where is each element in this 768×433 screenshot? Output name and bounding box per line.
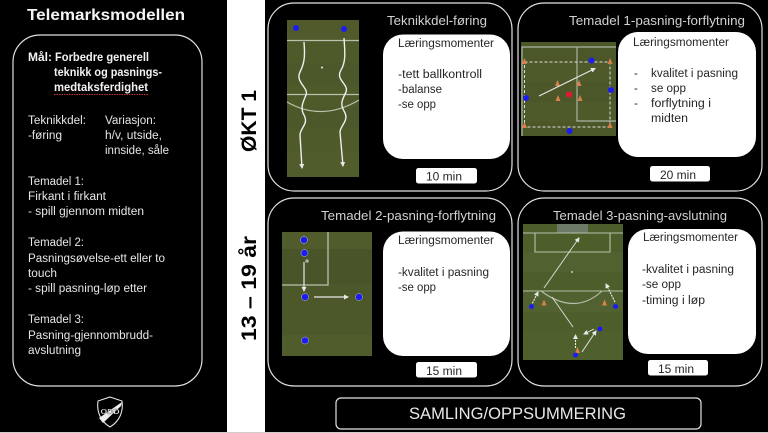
pitch diagram: passing drill (282, 232, 372, 356)
variation block: h/v, utside, (105, 130, 162, 142)
learning points card (383, 232, 510, 356)
duration badge (648, 360, 708, 376)
theme part 3 block: Pasning-gjennombrudd- (28, 330, 153, 342)
learning points card: forflytning i (651, 98, 711, 110)
summary bar (336, 398, 701, 429)
duration badge: 20 min (660, 170, 696, 182)
theme part 3 block: Temadel 3: (28, 314, 84, 326)
rotated label: session: ØKT 1 (238, 90, 261, 152)
panel title: Temadel 2-pasning-forflytning (321, 208, 496, 223)
goal text block: medtaksferdighet (54, 82, 148, 94)
duration badge (650, 166, 710, 182)
theme part 3 block (28, 314, 153, 357)
learning points card: Læringsmomenter (398, 235, 494, 247)
variation block: innside, såle (105, 145, 169, 157)
learning points card: -balanse (398, 84, 442, 96)
left sidebar (13, 7, 202, 427)
technique block: Teknikkdel: (28, 115, 86, 127)
theme part 2 block (28, 237, 165, 295)
learning points card (628, 229, 756, 354)
theme part 2 block: Pasningsøvelse-ett eller to (28, 253, 165, 265)
sidebar frame (13, 35, 202, 386)
learning points card: -tett ballkontroll (398, 69, 482, 81)
technique block: -føring (28, 130, 62, 142)
icon: club shield logo: ODD (100, 409, 120, 416)
panel title: Temadel 1-pasning-forflytning (569, 13, 745, 28)
panel: theme part 1 (518, 3, 762, 191)
theme part 2 block: Temadel 2: (28, 237, 84, 249)
duration badge: 15 min (658, 364, 694, 376)
learning points card: -kvalitet i pasning (398, 267, 489, 279)
theme part 3 block: avslutning (28, 345, 81, 357)
learning points card: se opp (651, 83, 686, 95)
icon: club shield logo (98, 397, 122, 427)
pitch diagram: square in square (521, 42, 616, 136)
goal text block: Mål: (28, 52, 52, 64)
panel title: Teknikkdel-føring (387, 13, 487, 28)
goal text block (28, 52, 162, 94)
summary bar: SAMLING/OPPSUMMERING (409, 405, 626, 423)
sidebar title: Telemarksmodellen (27, 7, 185, 24)
learning points card: -se opp (398, 282, 436, 294)
theme part 1 block: - spill gjennom midten (28, 206, 144, 218)
learning points card: -se opp (642, 279, 681, 291)
duration badge (416, 362, 477, 378)
variation block (105, 115, 169, 157)
goal text block: Forbedre generell (55, 52, 149, 64)
pitch diagram: dribbling (287, 20, 359, 177)
duration badge: 10 min (426, 172, 462, 184)
panel: theme part 2 (268, 198, 512, 386)
theme part 2 block: - spill pasning-løp etter (28, 283, 147, 295)
learning points card: - (634, 68, 638, 80)
panel title: Temadel 3-pasning-avslutning (553, 208, 727, 223)
learning points card: -timing i løp (642, 295, 705, 307)
learning points card: -se opp (398, 99, 436, 111)
duration badge (416, 168, 477, 184)
panel: theme part 3 (518, 198, 762, 386)
learning points card: midten (651, 113, 688, 125)
theme part 1 block: Temadel 1: (28, 176, 84, 188)
learning points card: Læringsmomenter (643, 232, 738, 244)
theme part 1 block: Firkant i firkant (28, 191, 107, 203)
rotated label: age group: 13 – 19 år (238, 236, 261, 341)
duration badge: 15 min (426, 366, 462, 378)
learning points card: - (634, 83, 638, 95)
pitch diagram: finishing (523, 224, 623, 360)
learning points card: -kvalitet i pasning (642, 264, 734, 276)
learning points card: Læringsmomenter (633, 37, 729, 49)
goal text block: teknikk og pasnings- (54, 67, 162, 79)
variation block: Variasjon: (105, 115, 156, 127)
learning points card (383, 34, 510, 159)
theme part 1 block (28, 176, 144, 218)
learning points card: kvalitet i pasning (651, 68, 738, 80)
learning points card: - (634, 98, 638, 110)
technique block (28, 115, 86, 142)
learning points card (618, 32, 756, 157)
learning points card: Læringsmomenter (398, 38, 494, 50)
theme part 2 block: touch (28, 268, 57, 280)
panel: technique part (268, 3, 512, 191)
